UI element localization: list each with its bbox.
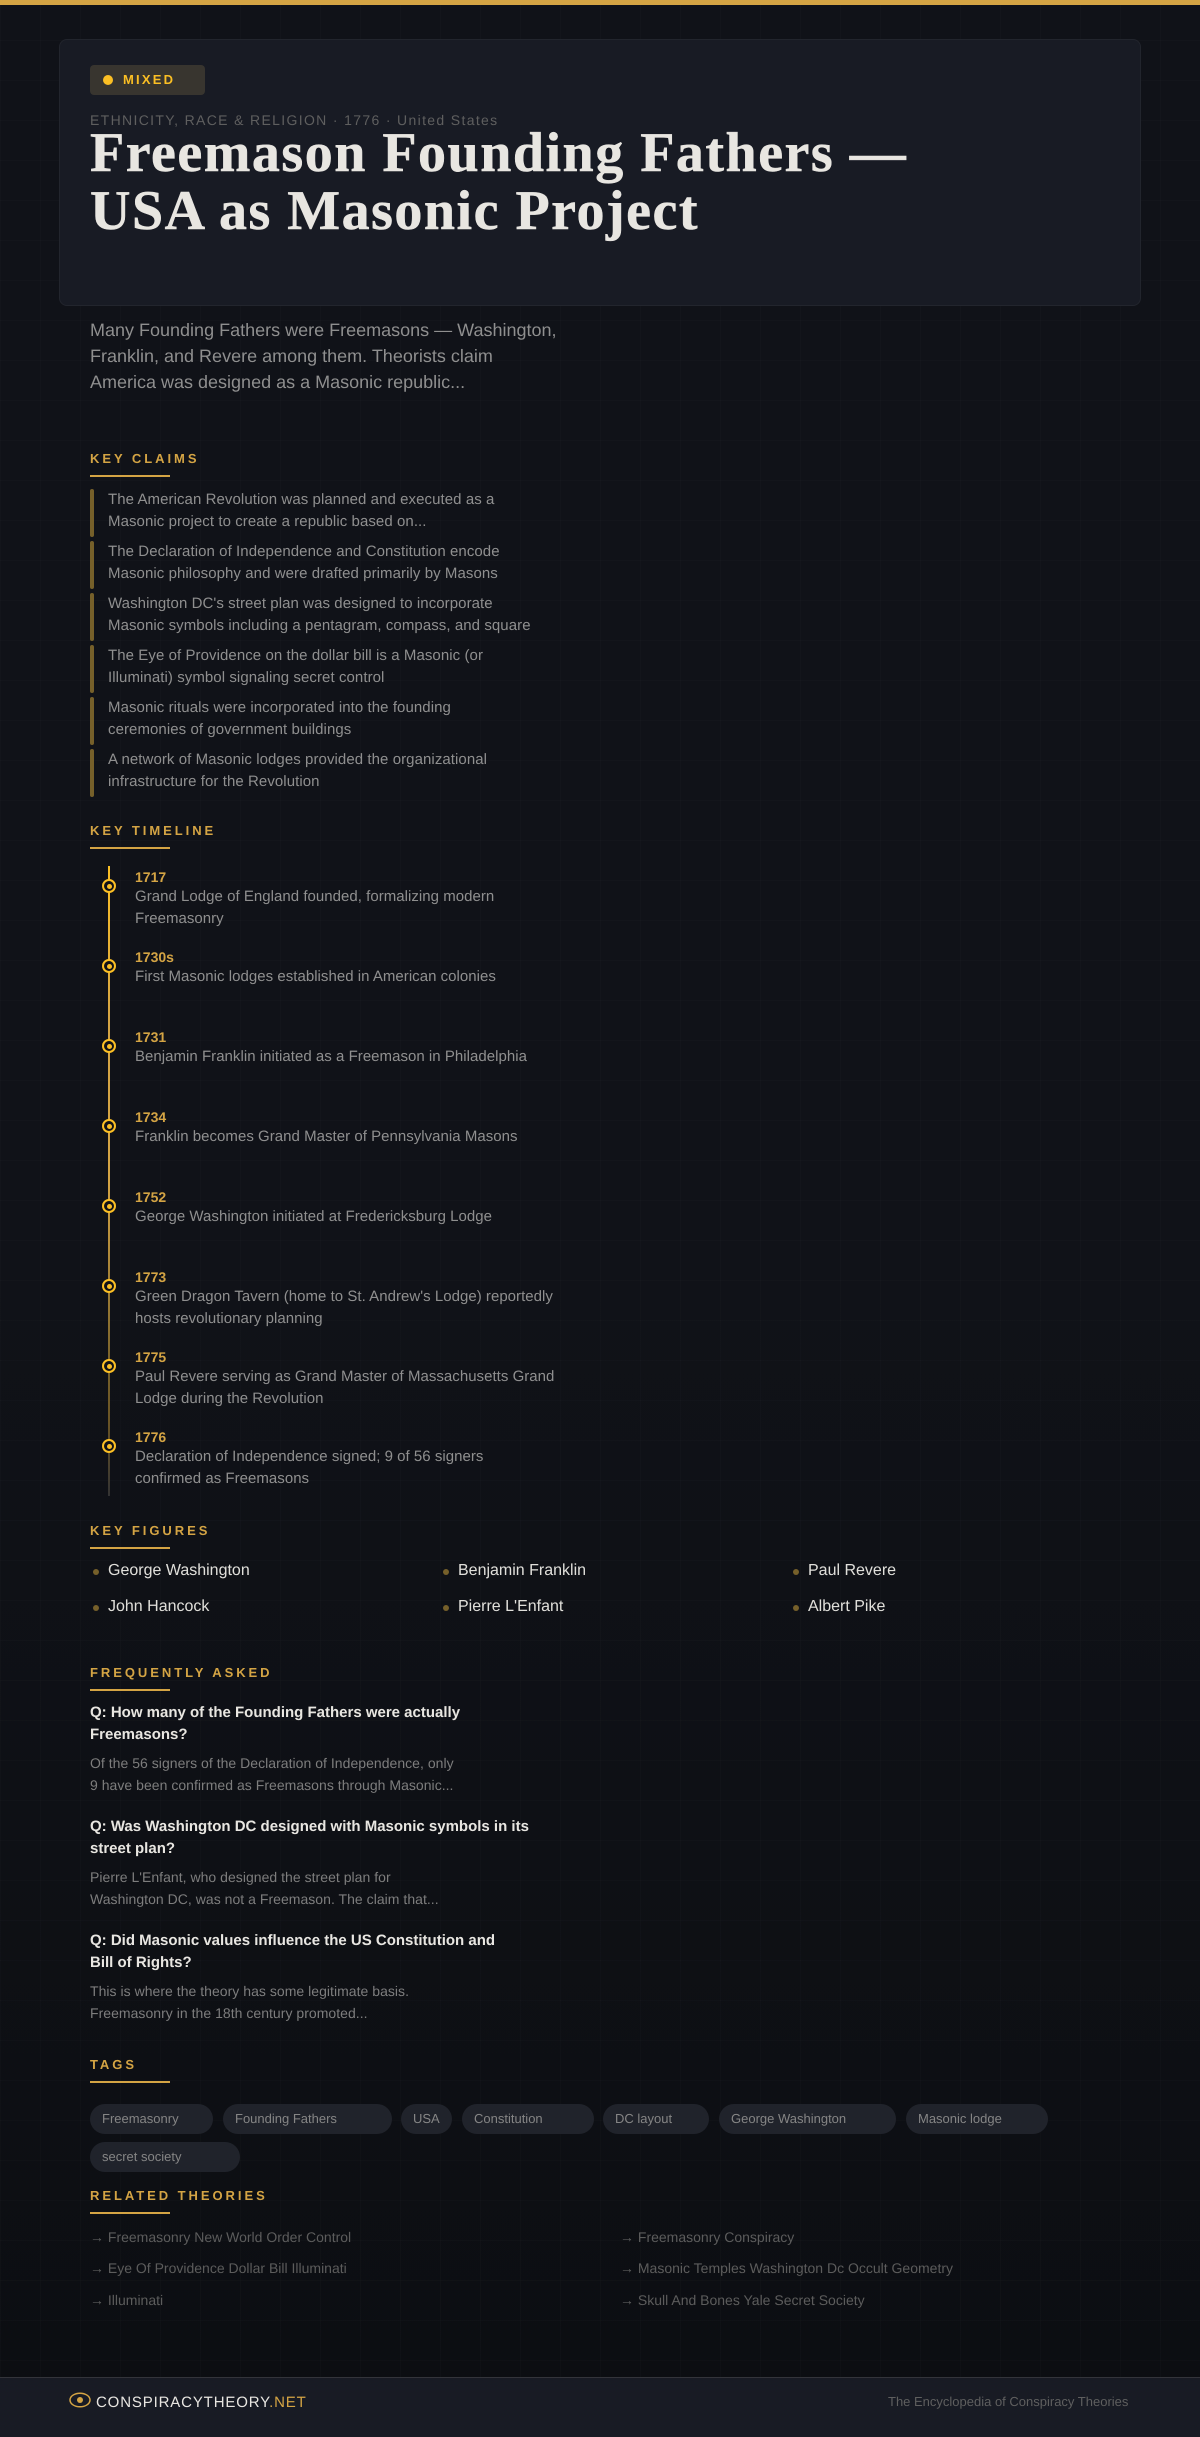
panel: key figures	[90, 1523, 896, 1615]
claim 2: Masonic philosophy and were drafted primarily by Masons	[108, 565, 498, 582]
answer: Pierre L'Enfant, who designed the street plan for	[90, 1869, 391, 1885]
tag: USA	[413, 2111, 440, 2126]
answer: Of the 56 signers of the Declaration of Independence, only	[90, 1755, 454, 1771]
figure: Paul Revere: Paul Revere	[808, 1562, 896, 1579]
description: Green Dragon Tavern (home to St. Andrew's Lodge) reportedly	[135, 1288, 553, 1305]
event 1776	[102, 1429, 483, 1487]
description: First Masonic lodges established in American colonies	[135, 968, 496, 985]
tag: Freemasonry	[102, 2111, 179, 2126]
panel: related theories	[90, 2188, 953, 2308]
year: 1773	[135, 1269, 166, 1285]
tag	[906, 2104, 1048, 2134]
related link: → Freemasonry New World Order Control	[90, 2229, 351, 2245]
icon: eye logo	[69, 2392, 91, 2408]
timeline marker	[102, 1199, 116, 1213]
claim 6: A network of Masonic lodges provided the organizational	[108, 751, 487, 768]
event 1734	[102, 1109, 518, 1145]
description: hosts revolutionary planning	[135, 1310, 323, 1327]
timeline marker	[102, 1359, 116, 1373]
top accent bar	[0, 0, 1200, 5]
panel: key timeline	[90, 823, 554, 1496]
question	[90, 1818, 529, 1857]
description: Freemasonry	[135, 910, 224, 927]
claim 1: The American Revolution was planned and executed as a	[108, 491, 494, 508]
claim 6	[90, 749, 610, 797]
claim 4	[90, 645, 610, 693]
title: USA as Masonic Project	[90, 180, 699, 242]
timeline marker	[102, 1279, 116, 1293]
figure: John Hancock: John Hancock	[108, 1598, 209, 1615]
tag: DC layout	[615, 2111, 672, 2126]
tag: Masonic lodge	[918, 2111, 1002, 2126]
tag	[223, 2104, 392, 2134]
tag	[462, 2104, 594, 2134]
tag: George Washington	[731, 2111, 846, 2126]
category and date line: ETHNICITY, RACE & RELIGION · 1776 · United States	[90, 112, 499, 128]
event 1752	[102, 1189, 492, 1225]
faq item 1	[90, 1704, 460, 1793]
tag	[401, 2104, 452, 2134]
logo wordmark: CONSPIRACYTHEORY.NET	[96, 2394, 307, 2411]
event 1730s	[102, 949, 496, 985]
description: Paul Revere serving as Grand Master of Massachusetts Grand	[135, 1368, 554, 1385]
intro summary: Many Founding Fathers were Freemasons — Washington,	[90, 320, 557, 340]
badge: mixed verdict	[90, 65, 205, 95]
answer: Freemasonry in the 18th century promoted...	[90, 2005, 368, 2021]
event 1775	[102, 1349, 554, 1407]
claim 2	[90, 541, 610, 589]
figure: Pierre L'Enfant: Pierre L'Enfant	[458, 1598, 563, 1615]
answer: This is where the theory has some legitimate basis.	[90, 1983, 409, 1999]
claim 2: The Declaration of Independence and Constitution encode	[108, 543, 500, 560]
related link: → Freemasonry Conspiracy	[620, 2229, 794, 2245]
timeline marker	[102, 879, 116, 893]
heading: key claims: KEY CLAIMS	[90, 451, 199, 466]
tag: Constitution	[474, 2111, 543, 2126]
description: Lodge during the Revolution	[135, 1390, 323, 1407]
claim 5: ceremonies of government buildings	[108, 721, 351, 738]
claim 3	[90, 593, 610, 641]
claim 4: The Eye of Providence on the dollar bill is a Masonic (or	[108, 647, 483, 664]
description: Declaration of Independence signed; 9 of 56 signers	[135, 1448, 483, 1465]
year: 1731	[135, 1029, 166, 1045]
answer: 9 have been confirmed as Freemasons through Masonic...	[90, 1777, 453, 1793]
event 1717	[102, 869, 494, 927]
description: confirmed as Freemasons	[135, 1470, 309, 1487]
tag	[90, 2142, 240, 2172]
timeline marker	[102, 959, 116, 973]
faq item 3	[90, 1932, 495, 2021]
heading: tags: TAGS	[90, 2057, 137, 2072]
question	[90, 1932, 495, 1971]
description: George Washington initiated at Fredericksburg Lodge	[135, 1208, 492, 1225]
figure: George Washington: George Washington	[108, 1562, 250, 1579]
question	[90, 1704, 460, 1743]
question: street plan?	[90, 1840, 175, 1857]
claim 4: Illuminati) symbol signaling secret control	[108, 669, 384, 686]
related link: → Eye Of Providence Dollar Bill Illuminati	[90, 2260, 347, 2276]
tag: Founding Fathers	[235, 2111, 337, 2126]
claim 1	[90, 489, 610, 537]
footer	[0, 2377, 1200, 2437]
related link: → Illuminati	[90, 2292, 163, 2308]
heading: frequently asked: FREQUENTLY ASKED	[90, 1665, 273, 1680]
faq item 2	[90, 1818, 529, 1907]
description	[135, 888, 494, 927]
heading: key timeline: KEY TIMELINE	[90, 823, 216, 838]
tag	[719, 2104, 896, 2134]
timeline rail	[108, 866, 110, 1496]
intro summary: Franklin, and Revere among them. Theorists claim	[90, 346, 493, 366]
year: 1775	[135, 1349, 166, 1365]
panel: hero header	[59, 39, 1141, 306]
tag: secret society	[102, 2149, 181, 2164]
related link: → Masonic Temples Washington Dc Occult Geometry	[620, 2260, 953, 2276]
intro summary	[90, 320, 557, 392]
claim 5: Masonic rituals were incorporated into the founding	[108, 699, 451, 716]
description	[135, 1448, 483, 1487]
panel: tags	[90, 2057, 1048, 2172]
year: 1752	[135, 1189, 166, 1205]
event 1731	[102, 1029, 527, 1065]
description: Grand Lodge of England founded, formalizing modern	[135, 888, 494, 905]
question: Freemasons?	[90, 1726, 188, 1743]
timeline marker	[102, 1439, 116, 1453]
claim 3: Masonic symbols including a pentagram, compass, and square	[108, 617, 531, 634]
heading: related theories: RELATED THEORIES	[90, 2188, 268, 2203]
description: Benjamin Franklin initiated as a Freemason in Philadelphia	[135, 1048, 527, 1065]
panel: frequently asked	[90, 1665, 529, 2021]
intro summary: America was designed as a Masonic republic...	[90, 372, 465, 392]
figure: Benjamin Franklin: Benjamin Franklin	[458, 1562, 586, 1579]
event 1773	[102, 1269, 553, 1327]
answer	[90, 1755, 454, 1793]
answer	[90, 1983, 409, 2021]
claim 3: Washington DC's street plan was designed to incorporate	[108, 595, 493, 612]
tag	[90, 2104, 213, 2134]
figure: Albert Pike: Albert Pike	[808, 1598, 885, 1615]
footer tagline: The Encyclopedia of Conspiracy Theories	[888, 2394, 1128, 2409]
description: Franklin becomes Grand Master of Pennsylvania Masons	[135, 1128, 518, 1145]
title: Freemason Founding Fathers —	[90, 122, 907, 184]
claim 6: infrastructure for the Revolution	[108, 773, 320, 790]
question: Q: Was Washington DC designed with Masonic symbols in its	[90, 1818, 529, 1835]
title	[90, 122, 907, 242]
question: Bill of Rights?	[90, 1954, 192, 1971]
question: Q: How many of the Founding Fathers were actually	[90, 1704, 460, 1721]
heading: key figures: KEY FIGURES	[90, 1523, 210, 1538]
icon: status dot	[103, 75, 113, 85]
year: 1734	[135, 1109, 166, 1125]
timeline marker	[102, 1119, 116, 1133]
related link: → Skull And Bones Yale Secret Society	[620, 2292, 865, 2308]
year: 1730s	[135, 949, 174, 965]
answer	[90, 1869, 439, 1907]
claim 5	[90, 697, 610, 745]
badge label: MIXED	[123, 72, 175, 87]
claim 1: Masonic project to create a republic based on...	[108, 513, 427, 530]
description	[135, 1288, 553, 1327]
description	[135, 1368, 554, 1407]
year: 1717	[135, 869, 166, 885]
answer: Washington DC, was not a Freemason. The claim that...	[90, 1891, 439, 1907]
year: 1776	[135, 1429, 166, 1445]
tag	[603, 2104, 709, 2134]
panel: key claims	[90, 451, 531, 797]
question: Q: Did Masonic values influence the US Constitution and	[90, 1932, 495, 1949]
timeline marker	[102, 1039, 116, 1053]
